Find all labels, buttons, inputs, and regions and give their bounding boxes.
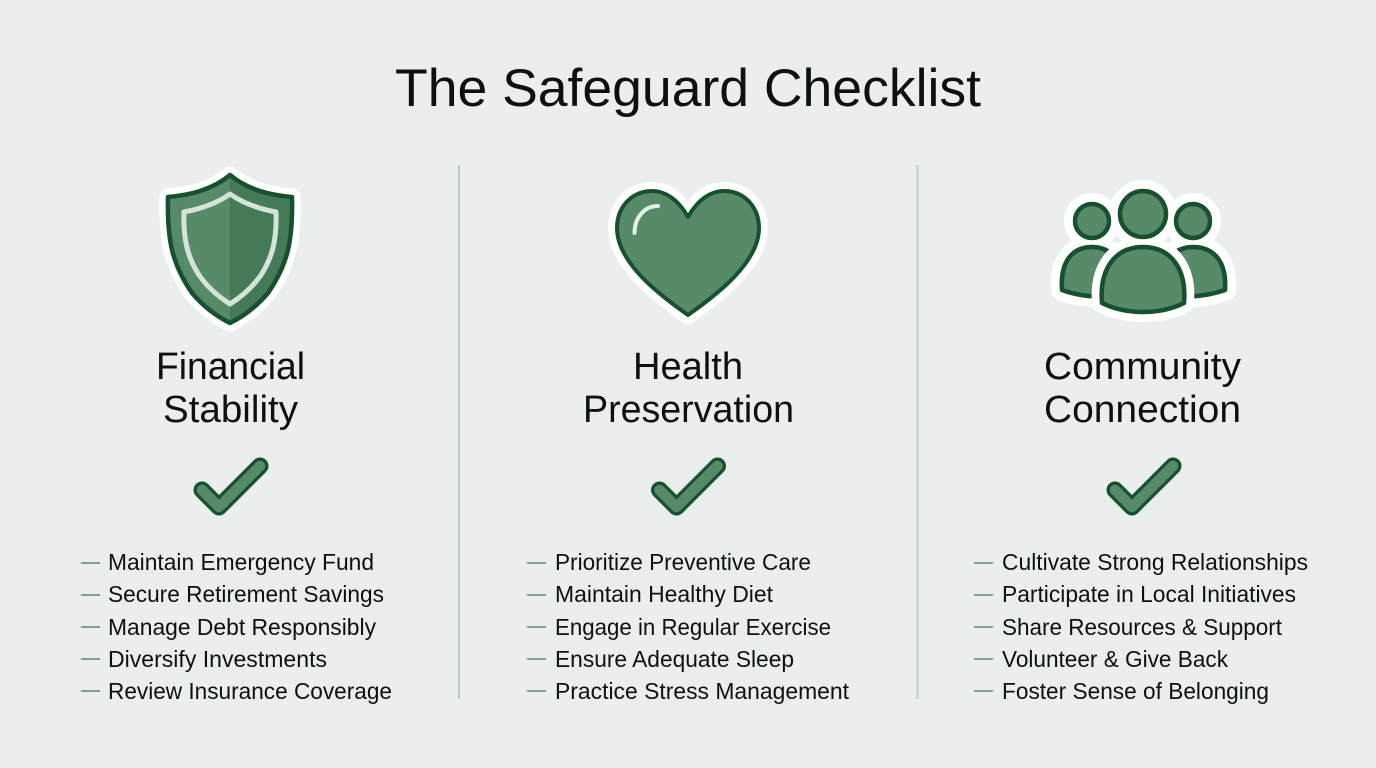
checklist: community items: Foster Sense of Belonging bbox=[1002, 678, 1269, 704]
checklist: financial items bbox=[81, 549, 392, 704]
checklist: community items: Cultivate Strong Relationships bbox=[1002, 549, 1308, 575]
heading: Community Connection: Community bbox=[1044, 346, 1241, 388]
checklist: health items: Ensure Adequate Sleep bbox=[555, 646, 794, 672]
checklist: community items: Share Resources & Support bbox=[1002, 614, 1282, 640]
checklist: community items: Volunteer & Give Back bbox=[1002, 646, 1228, 672]
icon: people group bbox=[1062, 191, 1225, 312]
panel: financial stability bbox=[81, 175, 392, 704]
heading: Health Preservation bbox=[583, 346, 794, 431]
checklist: health items: Maintain Healthy Diet bbox=[555, 581, 773, 607]
heading: Financial Stability: Stability bbox=[163, 389, 298, 431]
icon: check mark bbox=[202, 466, 260, 507]
heading: Financial Stability bbox=[156, 346, 305, 431]
checklist: health items: Practice Stress Management bbox=[555, 678, 849, 704]
checklist: community items bbox=[974, 549, 1308, 704]
panel: community connection bbox=[974, 191, 1308, 704]
checklist: financial items: Secure Retirement Savings bbox=[108, 581, 384, 607]
heading: Health Preservation: Preservation bbox=[583, 389, 794, 431]
panel: health preservation bbox=[527, 191, 849, 704]
checklist: health items: Engage in Regular Exercise bbox=[555, 614, 831, 640]
icon: check mark bbox=[660, 466, 718, 507]
heading: Financial Stability: Financial bbox=[156, 346, 305, 388]
checklist: health items: Prioritize Preventive Care bbox=[555, 549, 811, 575]
icon: heart bbox=[617, 191, 759, 315]
heading: Community Connection: Connection bbox=[1044, 389, 1241, 431]
heading: Health Preservation: Health bbox=[633, 346, 743, 388]
icon: shield bbox=[168, 175, 292, 323]
checklist: community items: Participate in Local Initiatives bbox=[1002, 581, 1296, 607]
checklist: financial items: Maintain Emergency Fund bbox=[108, 549, 374, 575]
checklist: financial items: Diversify Investments bbox=[108, 646, 327, 672]
checklist: financial items: Review Insurance Coverage bbox=[108, 678, 392, 704]
checklist: financial items: Manage Debt Responsibly bbox=[108, 614, 376, 640]
heading: Community Connection bbox=[1044, 346, 1241, 431]
icon: check mark bbox=[1115, 466, 1173, 507]
title: The Safeguard Checklist bbox=[395, 59, 981, 118]
checklist: health items bbox=[527, 549, 849, 704]
